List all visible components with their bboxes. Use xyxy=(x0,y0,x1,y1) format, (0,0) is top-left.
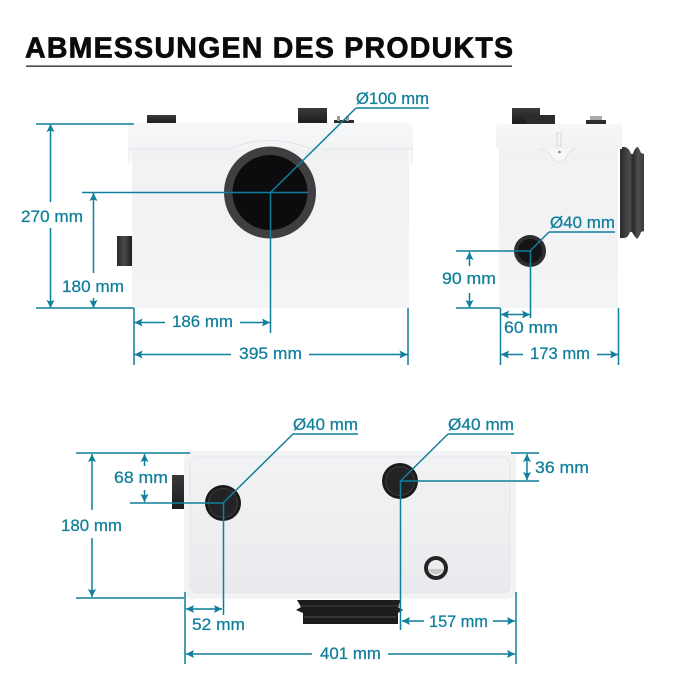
product: top view of the unit xyxy=(172,451,516,624)
label: width 401 mm: 401 mm xyxy=(320,644,381,663)
label: inlet offset 186 mm: 186 mm xyxy=(172,312,233,331)
dimension lines: side view xyxy=(456,232,618,365)
dimension lines: front view xyxy=(36,108,429,365)
label: offset 60 mm: 60 mm xyxy=(504,318,558,337)
label: height 270 mm: 270 mm xyxy=(21,207,83,226)
label: diameter 40 mm right: Ø40 mm xyxy=(448,415,514,434)
label: depth 173 mm: 173 mm xyxy=(530,344,590,363)
dimension lines: top view xyxy=(76,434,539,664)
label: inlet height 180 mm: 180 mm xyxy=(62,277,124,296)
label: offset 157 mm: 157 mm xyxy=(429,612,488,631)
label: width 395 mm: 395 mm xyxy=(239,344,302,363)
label: height 90 mm: 90 mm xyxy=(442,269,496,288)
label: depth 180 mm: 180 mm xyxy=(61,516,122,535)
panel: front view xyxy=(21,89,429,365)
label: diameter 40 mm left: Ø40 mm xyxy=(293,415,358,434)
label: diameter 40 mm: Ø40 mm xyxy=(550,213,615,232)
label: offset 68 mm: 68 mm xyxy=(114,468,168,487)
label: offset 36 mm: 36 mm xyxy=(535,458,589,477)
panel: side view xyxy=(442,108,644,365)
title: ABMESSUNGEN DES PRODUKTS xyxy=(25,32,513,64)
product: front view of the unit xyxy=(117,108,413,308)
label: diameter 100 mm: Ø100 mm xyxy=(356,89,429,108)
product: side view of the unit xyxy=(496,108,644,308)
panel: top view xyxy=(61,415,589,664)
label: offset 52 mm: 52 mm xyxy=(192,615,245,634)
